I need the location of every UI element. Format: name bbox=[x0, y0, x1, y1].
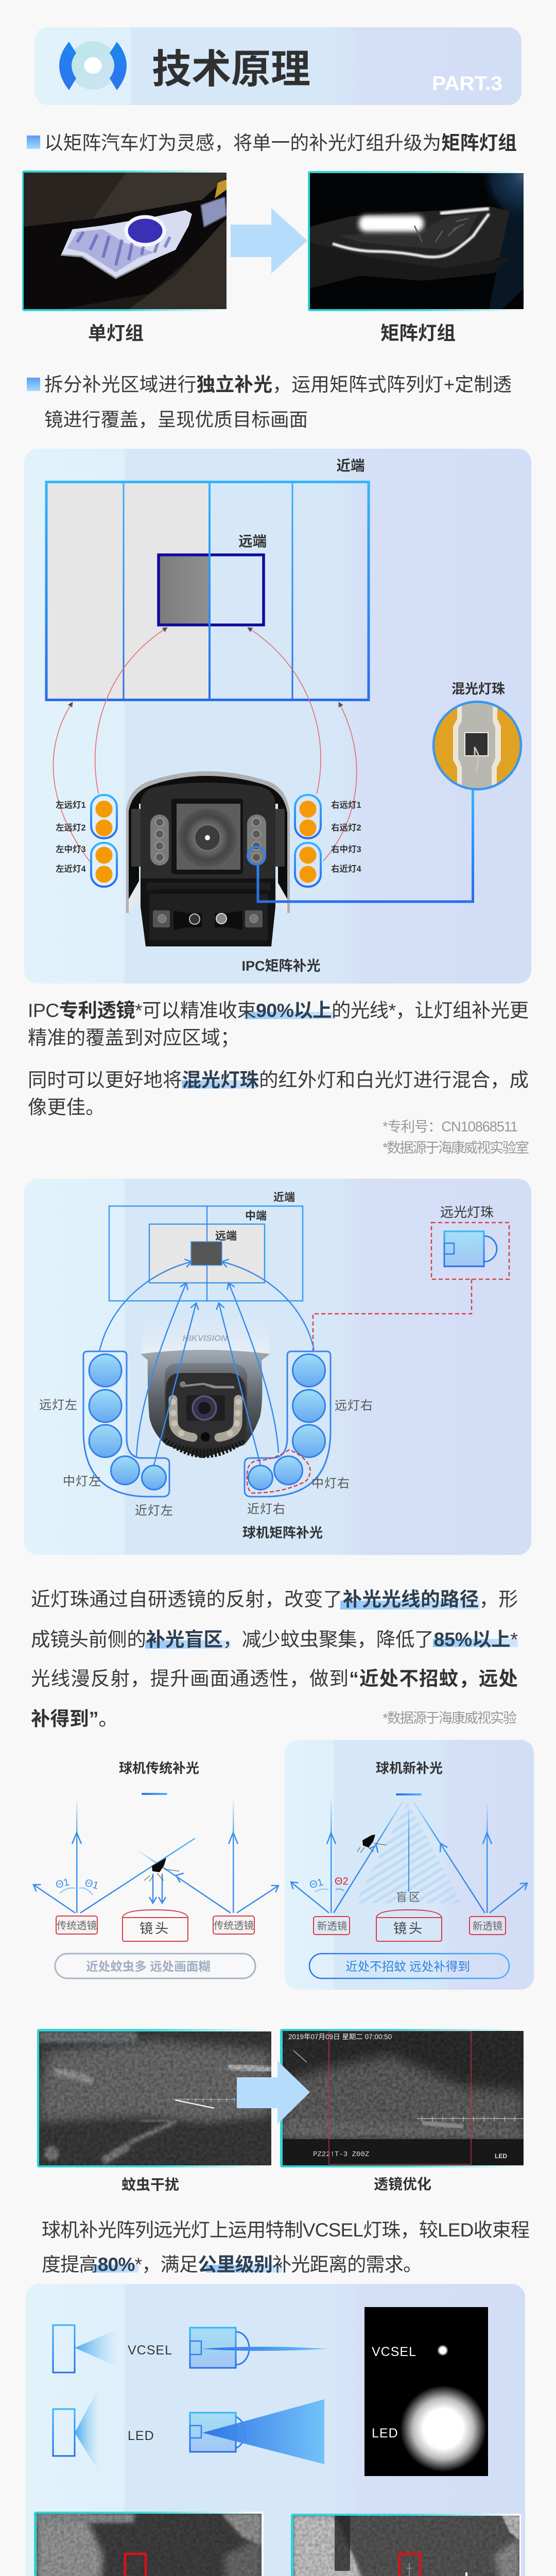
photo: optimized lens: 2019年07月09日 星期二 07:00:50 bbox=[288, 2033, 392, 2041]
matrix zones diagram bbox=[46, 481, 369, 701]
photo: optimized lens bbox=[280, 2029, 524, 2167]
lens labels: 新透镜 bbox=[317, 1921, 347, 1932]
lens VCSEL with beam bbox=[190, 2328, 328, 2368]
lamp labels: 远灯左 bbox=[39, 1398, 78, 1412]
text: near lamp lens explanation bbox=[31, 1588, 518, 1730]
arrow: single to matrix bbox=[231, 208, 307, 274]
rays bbox=[291, 1798, 527, 1913]
arrows: beams bbox=[99, 1262, 314, 1465]
camera: dome: HIKVISION bbox=[183, 1333, 228, 1343]
result pill: 近处不招蚊 远处补得到 bbox=[345, 1960, 470, 1973]
camera lens box bbox=[376, 1910, 442, 1941]
connector: lamp bead to macro view bbox=[248, 788, 473, 902]
lamp labels: 近灯右 bbox=[247, 1502, 286, 1516]
panel: dome camera matrix fill light bbox=[24, 1179, 531, 1555]
lamp labels: 中灯右 bbox=[311, 1477, 350, 1490]
angle labels: Θ1 bbox=[308, 1876, 324, 1891]
zones bbox=[109, 1206, 303, 1301]
lamp labels: 右近灯4 bbox=[331, 864, 361, 874]
text: IPC lens: IPC专利透镜*可以精准收束90%以上的光线*，让灯组补光更 bbox=[28, 999, 529, 1021]
photo: matrix lamp group bbox=[308, 171, 524, 311]
lamp labels bbox=[39, 1398, 373, 1518]
emitter LED bbox=[53, 2386, 99, 2472]
rays bbox=[33, 1798, 279, 1913]
lamp labels: 右远灯1 bbox=[331, 800, 361, 810]
label: mid: 中端 bbox=[245, 1210, 267, 1222]
camera: dome bbox=[141, 1316, 270, 1458]
result pill bbox=[309, 1954, 509, 1978]
beam comparison image: LED bbox=[372, 2426, 398, 2441]
label: far: 远端 bbox=[215, 1230, 237, 1242]
photo: LED target blurred bbox=[34, 2512, 264, 2576]
source note: *数据源于海康威视实验 bbox=[383, 1710, 517, 1726]
label: high-beam bead: 远光灯珠 bbox=[440, 1205, 494, 1220]
text: IPC lens: 精准的覆盖到对应区域； bbox=[28, 1027, 239, 1048]
camera: IPC front view bbox=[126, 771, 290, 946]
emitter VCSEL bbox=[53, 2325, 118, 2372]
label: far end: 远端 bbox=[238, 533, 267, 549]
text: VCSEL explanation: 球机补光阵列远光灯上运用特制VCSEL灯珠，较LED收束程 bbox=[42, 2219, 530, 2241]
bullet text: independent fill light: 拆分补光区域进行独立补光，运用矩阵式阵列灯+定制透 bbox=[44, 374, 512, 395]
lamp labels: 中灯左 bbox=[63, 1475, 101, 1488]
lamp outline right bbox=[245, 1351, 331, 1497]
caption: dome matrix fill: 球机矩阵补光 bbox=[242, 1525, 323, 1540]
title banner bbox=[34, 27, 522, 105]
text: near lamp lens explanation: 光线漫反射，提升画面通透性，做到“近处不招蚊，远处 bbox=[31, 1668, 518, 1689]
angle labels bbox=[55, 1876, 100, 1892]
headlamp lens shape bbox=[61, 210, 192, 278]
panel: new dome fill light: Θ2 bbox=[335, 1876, 349, 1887]
photo: VCSEL target clear bbox=[291, 2514, 521, 2576]
label LED: LED bbox=[128, 2429, 154, 2443]
arrow: interference to optimized bbox=[237, 2061, 310, 2124]
blind zone hatching bbox=[355, 1802, 461, 1903]
label: near end: 近端 bbox=[337, 457, 364, 473]
lens labels: 传统透镜 bbox=[57, 1920, 97, 1931]
source notes bbox=[383, 1118, 529, 1156]
lens labels: 传统透镜 bbox=[214, 1920, 254, 1931]
text: VCSEL explanation: 度提高80%*，满足公里级别补光距离的需求。 bbox=[42, 2254, 422, 2275]
bullet text: independent fill light: 镜进行覆盖，呈现优质目标画面 bbox=[44, 409, 308, 430]
photo: insect interference bbox=[37, 2029, 272, 2167]
source notes: *专利号：CN10868511 bbox=[383, 1118, 518, 1134]
text: near lamp lens explanation: 成镜头前侧的补光盲区，减少蚊虫聚集，降低了85%以上* bbox=[31, 1629, 518, 1650]
photo: single lamp group bbox=[22, 171, 227, 311]
arrows: lamp to zone bbox=[53, 628, 357, 862]
lamp outline left bbox=[83, 1351, 169, 1497]
high-beam bead icon bbox=[431, 1223, 509, 1279]
heading: 球机新补光 bbox=[376, 1760, 443, 1776]
photo: optimized lens: PZ22!T-3 Z00Z bbox=[313, 2150, 369, 2159]
lamp labels bbox=[56, 800, 361, 874]
caption: IPC matrix fill: IPC矩阵补光 bbox=[241, 958, 321, 974]
camera lens box: 镜头 bbox=[140, 1921, 170, 1936]
label: near: 近端 bbox=[273, 1192, 295, 1204]
icon: mosquito bbox=[357, 1835, 386, 1853]
label: blind zone: 盲区 bbox=[396, 1891, 422, 1904]
lens LED with beam bbox=[190, 2399, 324, 2464]
angle labels: Θ1 bbox=[55, 1876, 71, 1891]
lamp labels: 近灯左 bbox=[135, 1504, 173, 1518]
bullet text: independent fill light bbox=[27, 374, 512, 430]
panel: traditional dome fill light bbox=[33, 1760, 279, 1978]
part number: PART.3 bbox=[432, 73, 502, 95]
caption: optimized lens: 透镜优化 bbox=[374, 2176, 431, 2192]
text: IPC lens: 像更佳。 bbox=[28, 1096, 105, 1118]
lens labels bbox=[314, 1917, 506, 1935]
result pill: 近处蚊虫多 远处画面糊 bbox=[86, 1960, 211, 1973]
dashed connector bbox=[313, 1279, 472, 1351]
lamp labels: 左近灯4 bbox=[56, 864, 86, 874]
text: IPC lens: 同时可以更好地将混光灯珠的红外灯和白光灯进行混合，成 bbox=[28, 1069, 529, 1091]
heading: 球机传统补光 bbox=[119, 1760, 199, 1776]
icon: mosquito bbox=[144, 1858, 179, 1882]
label: mixed-light bead: 混光灯珠 bbox=[451, 681, 505, 697]
text: IPC lens bbox=[28, 999, 529, 1118]
lamp labels: 左远灯2 bbox=[56, 823, 86, 833]
lamp labels: 右远灯2 bbox=[331, 823, 361, 833]
caption: single lamp group: 单灯组 bbox=[88, 323, 144, 344]
panel: IPC matrix fill light bbox=[24, 449, 531, 984]
camera lens box bbox=[123, 1910, 188, 1941]
result pill bbox=[55, 1954, 255, 1978]
far end target bbox=[159, 555, 264, 625]
caption: insect interference: 蚊虫干扰 bbox=[121, 2177, 179, 2193]
beam comparison image: VCSEL bbox=[372, 2345, 416, 2359]
lamp beads bbox=[89, 1354, 325, 1490]
title text: 技术原理 bbox=[152, 47, 310, 92]
photo: optimized lens: LED bbox=[495, 2153, 507, 2160]
camera lens box: 镜头 bbox=[393, 1921, 424, 1936]
lamp labels: 左中灯3 bbox=[56, 844, 86, 854]
caption: matrix lamp group: 矩阵灯组 bbox=[380, 323, 456, 344]
angle labels: Θ1 bbox=[83, 1877, 100, 1892]
lamp group right bbox=[295, 795, 321, 887]
panel: VCSEL vs LED bbox=[26, 2284, 525, 2576]
beam comparison image bbox=[364, 2307, 488, 2476]
text: near lamp lens explanation: 近灯珠通过自研透镜的反射，改变了补光光线的路径，形 bbox=[31, 1588, 518, 1610]
panel: new dome fill light bbox=[285, 1740, 534, 1990]
dashed highlight: near and mid lamps bbox=[247, 1450, 310, 1493]
lamp group left bbox=[91, 795, 117, 887]
label VCSEL: VCSEL bbox=[128, 2343, 172, 2358]
lamp labels: 远灯右 bbox=[335, 1399, 373, 1413]
lamp labels: 左远灯1 bbox=[56, 800, 86, 810]
lens labels bbox=[56, 1916, 254, 1934]
lamp labels: 右中灯3 bbox=[331, 844, 361, 854]
text: VCSEL explanation bbox=[42, 2219, 530, 2275]
icon: light lens bbox=[59, 41, 127, 90]
text: near lamp lens explanation: 补得到”。 bbox=[31, 1708, 118, 1730]
macro view: lamp bead bbox=[433, 696, 521, 793]
bullet text: matrix headlight inspiration: 以矩阵汽车灯为灵感，将单一的补光灯组升级为矩阵灯组 bbox=[44, 132, 517, 154]
source notes: *数据源于海康威视实验室 bbox=[383, 1140, 529, 1156]
lens labels: 新透镜 bbox=[473, 1921, 502, 1932]
